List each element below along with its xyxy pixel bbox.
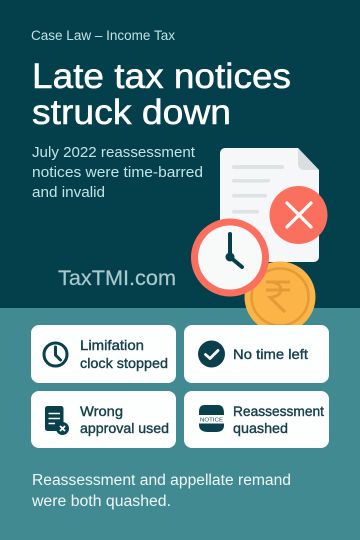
card text: approval used bbox=[80, 420, 169, 436]
panel: teal lower background bbox=[0, 308, 360, 540]
subtitle: July 2022 reassessment bbox=[32, 144, 196, 161]
title bbox=[32, 57, 291, 132]
subtitle bbox=[32, 144, 203, 201]
card text: Limifation bbox=[80, 337, 144, 353]
title: Late tax notices bbox=[32, 57, 291, 96]
subtitle: and invalid bbox=[32, 184, 105, 201]
card: wrong approval used bbox=[31, 391, 176, 448]
card text bbox=[233, 403, 324, 436]
icon: check circle bbox=[198, 340, 225, 368]
icon: clock outline bbox=[44, 343, 67, 366]
title: struck down bbox=[32, 93, 231, 132]
icon: stamped badge: NOTICE bbox=[200, 418, 224, 424]
icon: clock bbox=[191, 218, 269, 296]
subtitle: notices were time-barred bbox=[32, 164, 203, 181]
footer text: were both quashed. bbox=[31, 493, 171, 510]
eyebrow label: Case Law – Income Tax bbox=[31, 28, 175, 43]
card text: Reassessment bbox=[233, 403, 324, 419]
card: no time left bbox=[184, 325, 329, 383]
card text: Wrong bbox=[80, 403, 123, 419]
card text bbox=[80, 337, 168, 371]
icon: red cross badge bbox=[270, 186, 328, 244]
watermark: TaxTMI.com bbox=[58, 267, 176, 290]
card text bbox=[80, 403, 169, 436]
card: limitation clock stopped bbox=[31, 325, 176, 383]
icon: document bbox=[220, 148, 319, 262]
card text: No time left bbox=[233, 346, 308, 362]
icon: stamped badge bbox=[199, 405, 224, 432]
card text: quashed bbox=[233, 420, 288, 436]
footer text bbox=[31, 472, 291, 510]
footer text: Reassessment and appellate remand bbox=[32, 472, 291, 489]
card: reassessment quashed bbox=[184, 391, 329, 448]
icon: rupee coin bbox=[244, 262, 316, 332]
icon: document with cross bbox=[45, 406, 69, 435]
card text: clock stopped bbox=[80, 355, 168, 371]
panel: dark header background bbox=[0, 0, 360, 308]
